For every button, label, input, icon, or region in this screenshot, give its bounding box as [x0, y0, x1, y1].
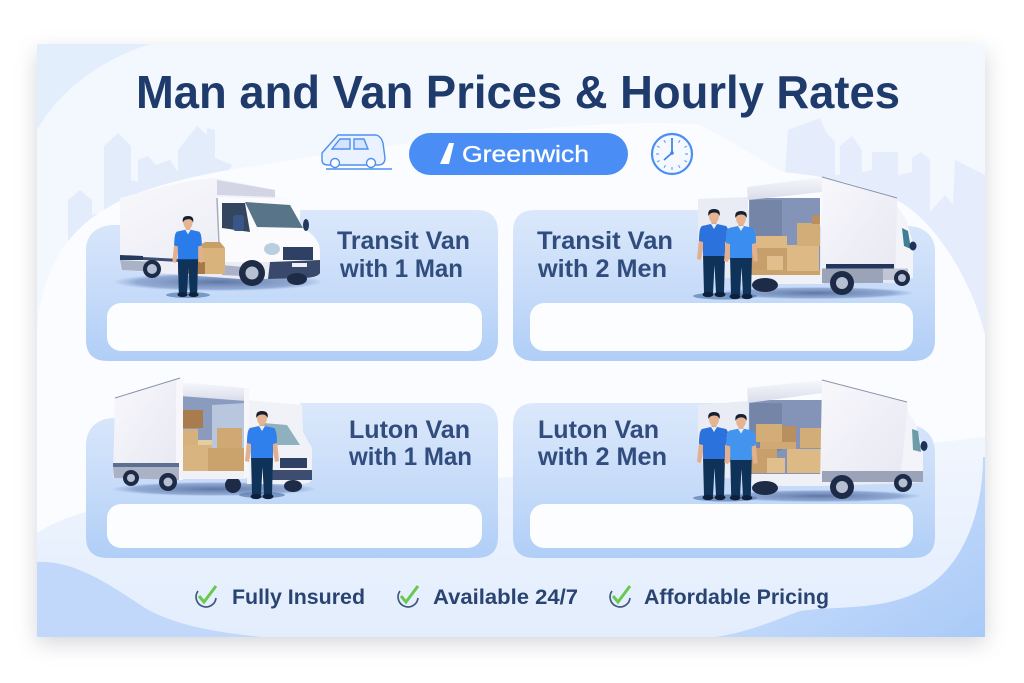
heading: Luton Van [538, 416, 659, 444]
price slot [107, 504, 482, 548]
heading: with 1 Man [339, 255, 463, 283]
location pill [409, 133, 628, 175]
heading: with 1 Man [348, 443, 472, 471]
heading: with 2 Men [537, 443, 667, 471]
panel: Luton Van with 1 Man [86, 378, 498, 558]
panel: Luton Van with 2 Men [513, 380, 935, 558]
illustration: open luton van with two men [693, 380, 928, 502]
heading: Transit Van [537, 227, 673, 255]
location pill: Greenwich [462, 141, 589, 167]
footer features [196, 586, 829, 609]
feature: Fully Insured: Fully Insured [232, 586, 365, 609]
icon: van outline [322, 135, 392, 169]
heading: Luton Van [349, 416, 470, 444]
icon: pin mark [440, 143, 454, 164]
illustration: open van with two men [693, 177, 916, 300]
feature: Available 24/7: Available 24/7 [433, 586, 578, 609]
illustration: open luton van with man [113, 378, 315, 499]
icon: clock [652, 134, 692, 174]
illustration: white box van with man [115, 178, 321, 298]
skyline right [785, 118, 985, 350]
cargo boxes [180, 410, 244, 471]
price slot [107, 303, 482, 351]
panel: Transit Van with 2 Men [513, 177, 935, 361]
panel: Transit Van with 1 Man [86, 178, 498, 361]
title: Man and Van Prices & Hourly Rates [136, 66, 900, 118]
price slot [530, 303, 913, 351]
heading: with 2 Men [537, 255, 667, 283]
cargo boxes [750, 424, 822, 473]
price slot [530, 504, 913, 548]
heading: Transit Van [337, 227, 470, 255]
cargo boxes [750, 215, 820, 271]
skyline left [68, 126, 232, 240]
feature: Affordable Pricing: Affordable Pricing [644, 586, 829, 609]
